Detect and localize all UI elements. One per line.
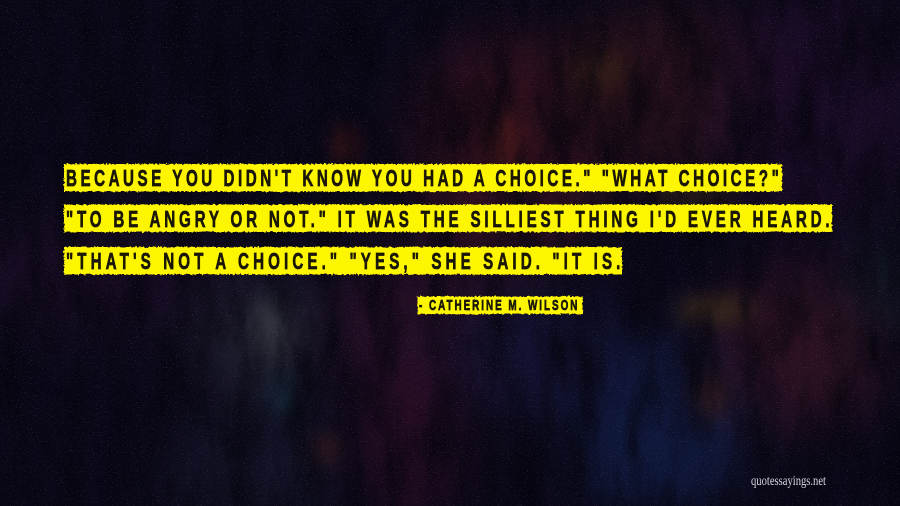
author attribution: - CATHERINE M. WILSON: [419, 297, 577, 314]
quote line 1: BECAUSE YOU DIDN'T KNOW YOU HAD A CHOICE." "WHAT CHOICE?": [66, 166, 779, 192]
quote line 3: "THAT'S NOT A CHOICE." "YES," SHE SAID. "IT IS.: [66, 249, 620, 275]
watermark: site name: quotessayings.net: [751, 473, 826, 488]
quote: yellow highlighted text: [64, 164, 832, 275]
quote line 2: "TO BE ANGRY OR NOT." IT WAS THE SILLIEST THING I'D EVER HEARD.: [66, 207, 830, 233]
